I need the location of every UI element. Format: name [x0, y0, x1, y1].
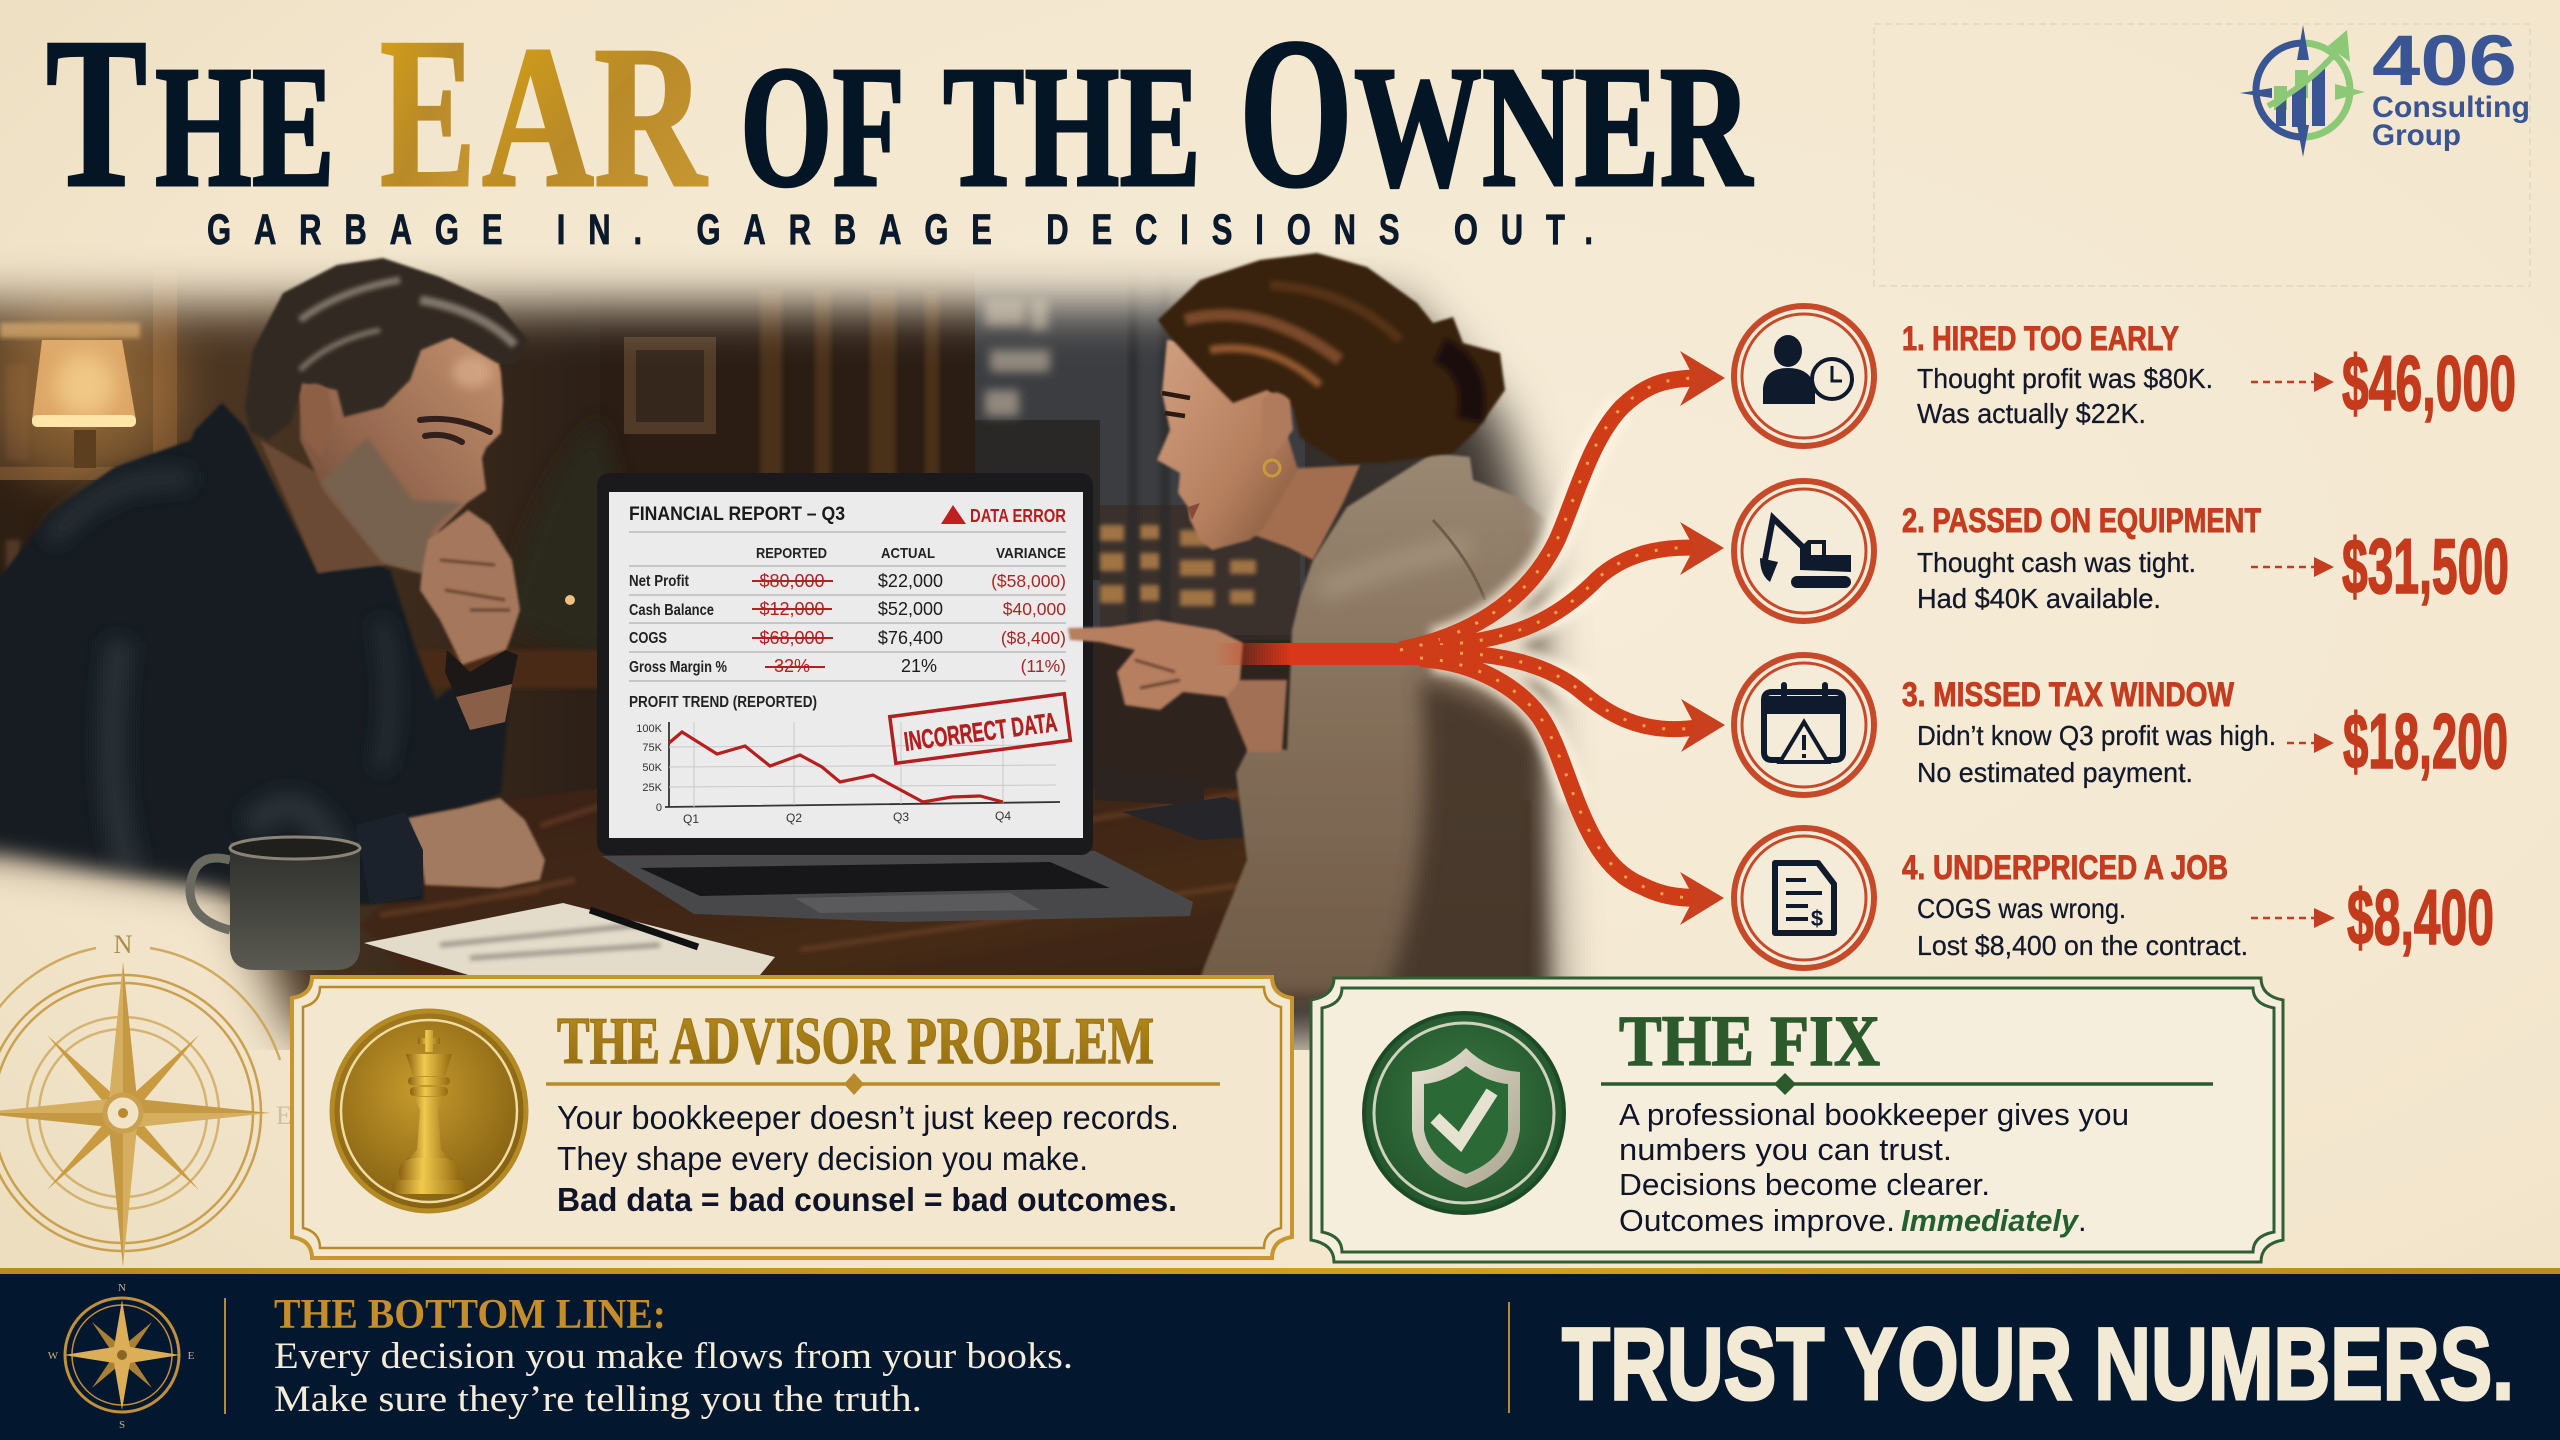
brow and eye	[420, 419, 490, 442]
report table: ($8,400)	[1001, 628, 1066, 648]
description: Was actually $22K.	[1917, 398, 2146, 429]
title: T	[46, 0, 147, 232]
chess king medallion	[332, 1011, 526, 1211]
report table: ($58,000)	[991, 571, 1066, 591]
profit trend chart: PROFIT TREND (REPORTED)	[629, 694, 817, 711]
laptop base	[602, 851, 1193, 922]
laptop lid	[597, 473, 1093, 855]
hair highlights	[1185, 285, 1472, 420]
panel: the advisor problem	[292, 977, 1292, 1258]
eye and brow	[1162, 393, 1190, 416]
lips	[1188, 503, 1200, 520]
panel heading: THE FIX	[1619, 1001, 1880, 1081]
profit trend chart	[629, 694, 1060, 826]
neck	[1240, 465, 1360, 560]
report table: (11%)	[1021, 656, 1066, 676]
room background	[0, 263, 1588, 1050]
advisor figure	[1068, 253, 1560, 1010]
bottom line text	[274, 1336, 1073, 1420]
description: Lost $8,400 on the contract.	[1917, 930, 2248, 961]
face	[1157, 340, 1298, 550]
report header: FINANCIAL REPORT – Q3	[629, 504, 845, 525]
incorrect data stamp	[890, 694, 1070, 763]
shield check medallion	[1364, 1013, 1564, 1213]
book and tablet on the table	[1095, 765, 1269, 840]
panel text: Outcomes improve.	[1619, 1203, 1895, 1238]
icon: person with clock	[1734, 306, 1874, 446]
description: COGS was wrong.	[1917, 893, 2126, 924]
report table: COGS	[629, 630, 667, 647]
icon: excavator	[1734, 481, 1874, 621]
banner compass icon: W	[48, 1350, 59, 1362]
dashed arrow	[2251, 557, 2334, 577]
ear	[300, 384, 333, 457]
bottom line text: Every decision you make flows from your books.	[274, 1336, 1073, 1377]
title: E	[380, 0, 476, 232]
pointing hand	[1068, 620, 1243, 710]
arrow to passed on equipment	[1440, 522, 1724, 645]
title	[46, 0, 1754, 232]
description	[1917, 720, 2276, 788]
description: Thought profit was $80K.	[1917, 363, 2213, 394]
ear	[1262, 392, 1293, 457]
consequence 3: missed tax window	[1734, 655, 2508, 795]
arrow to missed tax window	[1440, 653, 1725, 752]
profit trend chart: 50K	[642, 762, 663, 774]
panel frame	[292, 977, 1292, 1258]
panel: the fix	[1311, 978, 2283, 1262]
logo: 406 Consulting Group: Consulting	[2372, 91, 2530, 124]
logo: 406 Consulting Group: Group	[2372, 119, 2461, 152]
banner compass icon: N	[118, 1282, 126, 1294]
compass N label: N	[114, 930, 133, 959]
panel text: Decisions become clearer.	[1619, 1167, 1990, 1202]
dashed arrow	[2287, 733, 2334, 753]
sweater	[0, 403, 509, 905]
report table: Cash Balance	[629, 602, 714, 619]
heading: 4. UNDERPRICED A JOB	[1902, 849, 2228, 887]
laptop	[597, 473, 1193, 922]
panel text: Bad data = bad counsel = bad outcomes.	[557, 1181, 1177, 1218]
title: HE	[155, 30, 335, 223]
arrow cream glow	[1433, 407, 1622, 800]
logo compass mark	[2240, 25, 2365, 157]
incorrect data stamp: INCORRECT DATA	[902, 707, 1059, 757]
panel text: Immediately	[1901, 1203, 2080, 1238]
report table: 32%	[774, 656, 810, 676]
profit trend chart: Q1	[683, 812, 699, 826]
report table: Net Profit	[629, 573, 689, 590]
report table: $52,000	[878, 599, 943, 619]
banner compass icon: S	[119, 1419, 125, 1431]
neck	[260, 440, 385, 573]
report table: $80,000	[759, 571, 825, 591]
hair	[1158, 253, 1505, 463]
description: Didn’t know Q3 profit was high.	[1917, 720, 2276, 751]
report header: DATA ERROR	[970, 506, 1066, 526]
report table	[629, 532, 1066, 681]
panel text: .	[2078, 1203, 2087, 1238]
king piece	[392, 1030, 466, 1194]
face	[300, 337, 503, 573]
laptop screen	[609, 492, 1083, 838]
banner compass icon: E	[188, 1350, 195, 1362]
profit trend chart: Q2	[786, 811, 802, 825]
subtitle: GARBAGE IN. GARBAGE DECISIONS OUT.	[207, 205, 1593, 253]
photo scene: owner and advisor at the table	[0, 251, 1588, 1050]
wrist	[456, 684, 512, 730]
coffee mug	[190, 837, 360, 970]
heading divider	[546, 1073, 1220, 1095]
title: AR	[482, 4, 708, 229]
bottom banner	[0, 1268, 2560, 1440]
panel heading: THE ADVISOR PROBLEM	[557, 1004, 1154, 1078]
description: Thought cash was tight.	[1917, 547, 2196, 578]
report table: $68,000	[759, 628, 825, 648]
red flow arrows from pointing hand to consequences	[1215, 351, 1725, 925]
watch	[445, 650, 518, 697]
diagonal compass points	[47, 1035, 199, 1190]
cardinal compass points	[0, 962, 270, 1267]
arrow trunk	[1215, 643, 1453, 665]
description	[1917, 893, 2248, 961]
title: THE	[943, 30, 1201, 223]
forearm	[1218, 680, 1287, 752]
panel text: Your bookkeeper doesn’t just keep records.	[557, 1099, 1179, 1136]
report table: $22,000	[878, 571, 943, 591]
profit trend chart: 25K	[642, 782, 663, 794]
icon: calendar warning	[1734, 655, 1874, 795]
title: WNER	[1354, 30, 1754, 223]
panel text	[557, 1099, 1179, 1218]
report header	[629, 504, 1066, 526]
bottom line heading: THE BOTTOM LINE:	[274, 1292, 666, 1338]
profit trend chart: 75K	[642, 742, 663, 754]
description	[1917, 363, 2213, 429]
sweater light folds	[50, 479, 390, 870]
heading: 3. MISSED TAX WINDOW	[1902, 676, 2235, 714]
arrow red glow on sleeve	[1240, 638, 1440, 672]
owner figure	[0, 258, 545, 905]
jacket	[1190, 453, 1560, 1010]
arrow to hired too early	[1400, 351, 1725, 650]
arrow to underpriced a job	[1420, 658, 1724, 925]
lapel highlight	[1320, 545, 1470, 590]
profit trend chart: 100K	[636, 723, 663, 735]
report table: $12,000	[759, 599, 825, 619]
heading divider	[1601, 1073, 2213, 1095]
jacket shadow lower right	[1380, 680, 1560, 1010]
consequence 4: underpriced a job	[1734, 828, 2494, 968]
panel text	[1619, 1097, 2129, 1238]
icon: invoice document	[1734, 828, 1874, 968]
report table: $40,000	[1003, 599, 1066, 619]
panel text: A professional bookkeeper gives you	[1619, 1097, 2129, 1132]
profit trend chart: 0	[656, 802, 662, 814]
title: O	[1239, 0, 1353, 232]
panel frame	[1311, 978, 2283, 1262]
icon: invoice document: $	[1811, 906, 1823, 931]
hand on chin	[420, 510, 520, 665]
report table: 21%	[901, 656, 937, 676]
consequence 1: hired too early	[1734, 306, 2516, 446]
forehead highlight	[452, 356, 492, 388]
report table: Gross Margin %	[629, 659, 727, 676]
report table: $76,400	[878, 628, 943, 648]
bottom line text: Make sure they’re telling you the truth.	[274, 1379, 922, 1420]
earring	[1264, 460, 1280, 476]
profit trend chart: Q3	[893, 810, 909, 824]
compass E label: E	[276, 1101, 292, 1130]
description: No estimated payment.	[1917, 757, 2193, 788]
hair	[245, 258, 528, 440]
dashed arrow	[2251, 908, 2335, 928]
description	[1917, 547, 2196, 614]
title: OF	[740, 30, 905, 223]
logo: 406 Consulting Group	[1874, 22, 2530, 286]
panel text: They shape every decision you make.	[557, 1140, 1088, 1177]
sweater cuff	[356, 812, 423, 905]
dashed arrow	[2251, 372, 2334, 392]
consequence 2: passed on equipment	[1734, 481, 2509, 621]
heading: 2. PASSED ON EQUIPMENT	[1902, 502, 2261, 540]
profit trend chart: Q4	[995, 809, 1011, 823]
panel text: numbers you can trust.	[1619, 1132, 1952, 1167]
logo wordmark: 406	[2372, 22, 2517, 101]
beard	[321, 437, 463, 573]
background compass rose	[0, 930, 292, 1267]
grey hair highlights	[300, 280, 515, 370]
report table: REPORTED	[756, 545, 827, 562]
wooden table	[360, 788, 1530, 1000]
description: Had $40K available.	[1917, 583, 2161, 614]
notebook and pen	[364, 903, 775, 978]
report table: ACTUAL	[881, 545, 935, 562]
banner compass icon	[48, 1282, 195, 1431]
heading: 1. HIRED TOO EARLY	[1902, 320, 2179, 358]
report table: VARIANCE	[996, 545, 1066, 562]
lower hand	[408, 798, 545, 888]
